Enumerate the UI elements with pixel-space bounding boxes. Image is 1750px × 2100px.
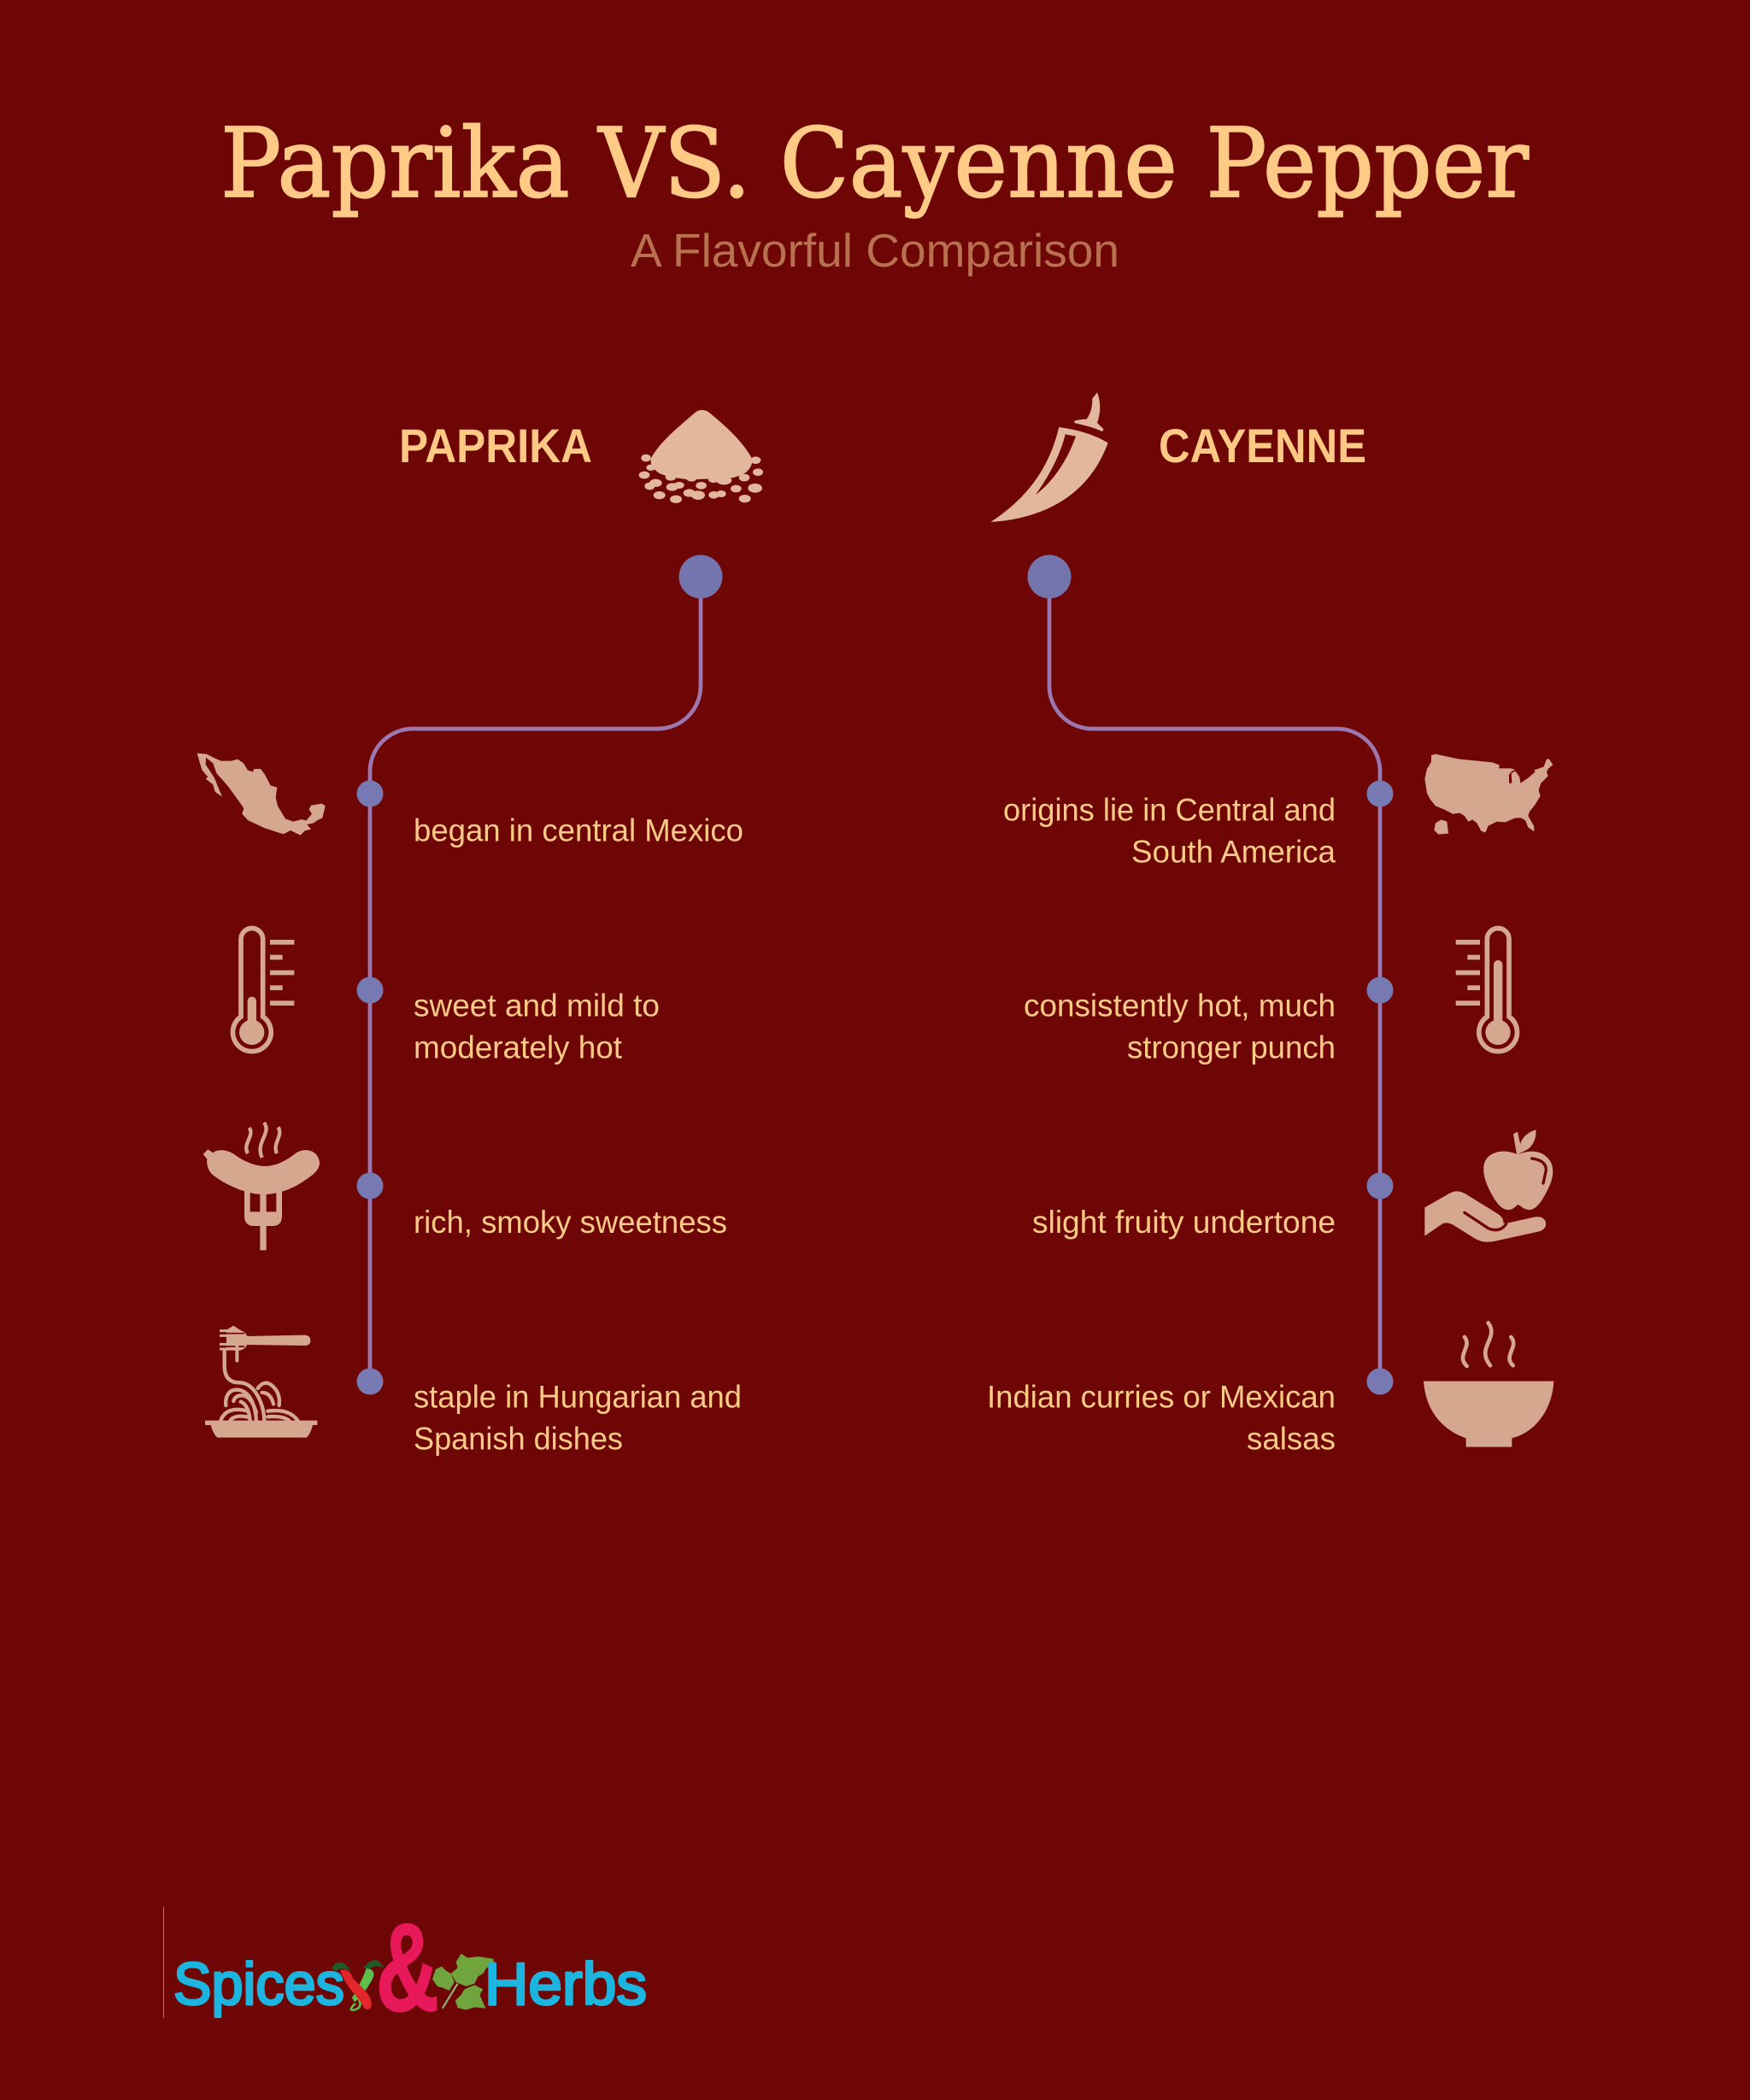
logo word: Herbs: Herbs <box>484 1950 647 2017</box>
text: flavor: rich, smoky sweetness <box>414 1205 727 1240</box>
panel: paprika column <box>197 410 763 1456</box>
text: heat level: moderately hot <box>414 1030 623 1065</box>
icon: map of the Americas <box>1424 754 1553 835</box>
timeline start node: paprika <box>678 555 723 598</box>
icon: thermometer high <box>1456 928 1517 1052</box>
text: cuisine: salsas <box>1247 1422 1336 1456</box>
logo: Spices & Herbs <box>164 1898 647 2037</box>
text: heat level: consistently hot, much <box>1024 988 1336 1024</box>
panel: cayenne column <box>987 392 1553 1456</box>
heading: cayenne: CAYENNE <box>1159 419 1366 472</box>
timeline connector: paprika <box>370 577 701 1381</box>
text: origin <box>1003 793 1336 870</box>
text: heat level <box>1024 988 1336 1065</box>
text: cuisine <box>414 1379 742 1456</box>
text: heat level: sweet and mild to <box>414 988 660 1024</box>
text: flavor: slight fruity undertone <box>1032 1205 1336 1240</box>
heading: paprika: PAPRIKA <box>399 419 592 472</box>
icon: smoked sausage on fork <box>203 1123 320 1250</box>
text: cuisine: Spanish dishes <box>414 1422 623 1456</box>
icon: hand holding apple <box>1424 1129 1553 1242</box>
text: origin: origins lie in Central and <box>1003 793 1336 827</box>
logo ampersand: & <box>376 1898 439 2037</box>
text: cuisine: Indian curries or Mexican <box>987 1379 1336 1415</box>
icon: thermometer low <box>232 928 294 1052</box>
logo icon: chili peppers <box>332 1960 385 2010</box>
text: heat level: stronger punch <box>1127 1030 1336 1065</box>
timeline nodes: paprika <box>357 781 383 1394</box>
text: heat level <box>414 988 660 1065</box>
icon: chili pepper <box>990 392 1108 522</box>
icon: pasta plate with fork <box>205 1326 317 1438</box>
icon: map of Mexico <box>197 754 326 836</box>
icon: steaming bowl <box>1424 1323 1553 1447</box>
text: origin: South America <box>1131 834 1336 870</box>
timeline connector: cayenne <box>1049 577 1380 1381</box>
text: cuisine: staple in Hungarian and <box>414 1379 742 1415</box>
subtitle: A Flavorful Comparison <box>631 224 1119 277</box>
logo word: Spices: Spices <box>173 1950 344 2017</box>
timeline start node: cayenne <box>1027 555 1072 598</box>
title: Paprika VS. Cayenne Pepper <box>220 109 1529 220</box>
timeline nodes: cayenne <box>1367 781 1393 1394</box>
text: cuisine <box>987 1379 1336 1456</box>
icon: spice powder heap <box>639 410 763 503</box>
logo icon: parsley sprig <box>432 1954 495 2010</box>
text: origin: began in central Mexico <box>414 813 743 848</box>
